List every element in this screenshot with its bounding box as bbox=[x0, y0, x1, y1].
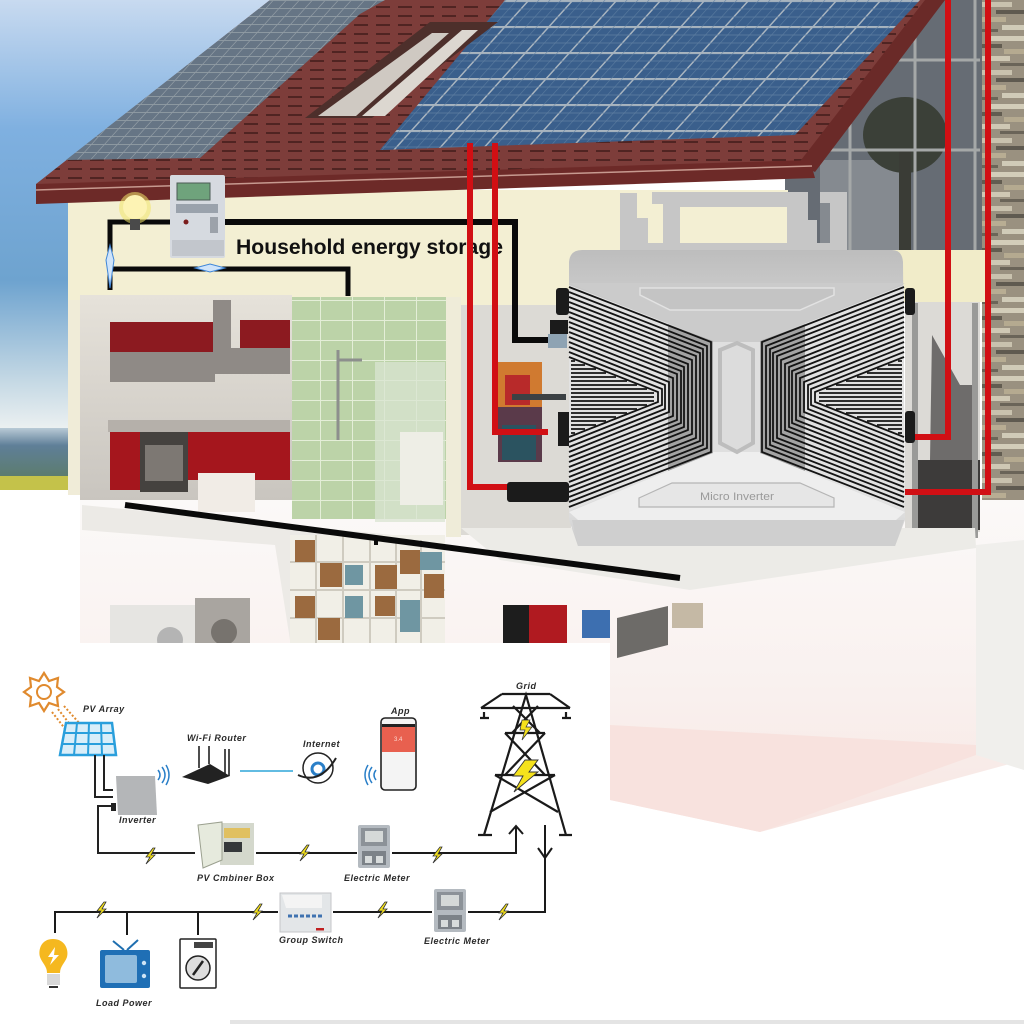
room: kitchen bbox=[80, 295, 292, 512]
column bbox=[446, 297, 461, 537]
upper label plate bbox=[640, 288, 834, 310]
system diagram bbox=[24, 673, 572, 1008]
right heat sink fins bbox=[760, 285, 904, 511]
upper facet bbox=[569, 283, 905, 342]
label: Grid: Grid bbox=[516, 681, 537, 691]
gutter bbox=[36, 160, 815, 204]
icon: phone app: 3.4 bbox=[394, 737, 403, 743]
center hexagon bbox=[720, 343, 753, 452]
shelves bbox=[290, 535, 445, 643]
counter and lower cabinets bbox=[108, 420, 290, 490]
icon: electric meter one bbox=[358, 825, 390, 868]
skylight bbox=[305, 22, 498, 118]
label: Group Switch: Group Switch bbox=[279, 935, 344, 945]
center strip bbox=[713, 342, 760, 452]
product name: Micro Inverter bbox=[700, 491, 774, 503]
link router to internet bbox=[240, 770, 293, 772]
landscape hills and field bbox=[0, 428, 72, 490]
icon: washing machine bbox=[180, 939, 216, 988]
label: PV Cmbiner Box: PV Cmbiner Box bbox=[197, 873, 275, 883]
room: living bbox=[461, 305, 571, 535]
left heat sink fins bbox=[569, 285, 713, 511]
black wires bbox=[110, 222, 680, 578]
icon: combiner box bbox=[198, 822, 254, 868]
body bbox=[569, 250, 905, 546]
label: Electric Meter one: Electric Meter bbox=[344, 873, 410, 883]
upper right glass window bbox=[785, 0, 985, 255]
floor slab bbox=[461, 528, 976, 590]
painting bbox=[498, 362, 542, 462]
upper red cabinets bbox=[110, 320, 290, 352]
icon: load bulb bbox=[39, 939, 67, 988]
icon: internet globe bbox=[298, 753, 336, 783]
bottom faint band bbox=[230, 1020, 1024, 1024]
red wires bbox=[470, 0, 988, 492]
bolts on wires bbox=[97, 845, 508, 920]
wire: from grid bbox=[55, 825, 552, 935]
heading: household energy storage: Household energy storage bbox=[236, 236, 503, 259]
white diagram panel bbox=[0, 643, 610, 1024]
roof tiles bbox=[36, 0, 945, 186]
icon: electric sparks bbox=[106, 245, 225, 288]
storage boxes bbox=[503, 603, 703, 658]
sky background bbox=[0, 0, 300, 432]
icon: electric meter two bbox=[434, 889, 466, 932]
icon: sun bbox=[24, 673, 80, 730]
wires: panel to inverter bbox=[95, 755, 195, 853]
right solar panel bbox=[380, 0, 920, 150]
icon: wifi signal inverter bbox=[158, 765, 169, 785]
mounting bracket bbox=[620, 192, 847, 252]
micro inverter bbox=[507, 192, 915, 546]
right roof edge bbox=[798, 0, 945, 172]
tower lightning bolts bbox=[513, 720, 538, 792]
washing machines bbox=[110, 598, 250, 653]
connectors left bbox=[507, 288, 569, 502]
connectors right bbox=[905, 288, 915, 443]
lower facet bbox=[569, 452, 905, 520]
icon: television bbox=[100, 940, 150, 988]
radiator bbox=[198, 473, 255, 512]
oven bbox=[140, 432, 188, 492]
hood bbox=[110, 300, 290, 382]
stone wall bbox=[982, 0, 1024, 540]
lower label plate bbox=[639, 483, 834, 507]
room: bathroom bbox=[292, 297, 446, 522]
icon: phone app bbox=[381, 718, 416, 790]
icon: light bulb bbox=[119, 192, 151, 230]
icon: PV panel bbox=[60, 723, 116, 755]
icon: electric meter bbox=[170, 175, 225, 258]
wire: up to grid bbox=[256, 826, 523, 853]
white lower background bbox=[0, 490, 1024, 1024]
left solar panel bbox=[66, 0, 385, 160]
icon: router bbox=[182, 746, 230, 784]
label: Load Power: Load Power bbox=[96, 998, 152, 1008]
label: Inverter: Inverter bbox=[119, 815, 156, 825]
label: App: App bbox=[390, 706, 410, 716]
living room lower right bbox=[905, 302, 980, 548]
bottom edge band bbox=[572, 520, 904, 546]
label: PV Array: PV Array bbox=[83, 704, 125, 714]
icon: transmission tower bbox=[478, 694, 572, 835]
icon: group switch bbox=[280, 893, 331, 932]
basement walls and floor bbox=[80, 500, 1024, 832]
label: Wi-Fi Router: Wi-Fi Router bbox=[187, 733, 246, 743]
icon: inverter bbox=[111, 776, 157, 815]
label: Internet: Internet bbox=[303, 739, 341, 749]
icon: wifi signal app bbox=[365, 765, 376, 785]
basement items bbox=[110, 535, 703, 658]
label: Electric Meter two: Electric Meter bbox=[424, 936, 490, 946]
house wall bbox=[68, 190, 788, 305]
